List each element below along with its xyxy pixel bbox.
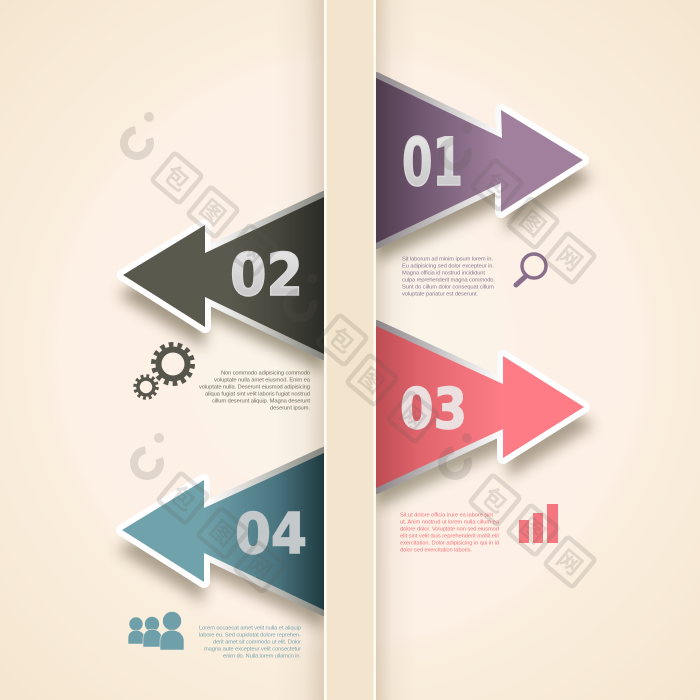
text block 01: Eu adipisicing sed dolor excepteur in. — [402, 264, 494, 270]
text block 01: Sunt do cillum dolor consequat cillum — [402, 284, 494, 290]
text block 02: voluptate nulla amet eiusmod. Enim ea — [214, 378, 311, 384]
text block 02: voluptate nulla. Deserunt eiusmod adipisicing — [199, 384, 310, 390]
text block 03 — [400, 512, 500, 554]
number 02: 02 — [230, 240, 303, 309]
watermarks: 网 — [551, 236, 591, 278]
watermarks: 图 — [514, 508, 554, 550]
icon: bar chart — [519, 504, 558, 543]
text block 04: Lorem occaecat amet velit nulla et aliquip — [199, 626, 301, 632]
text block 01 — [402, 256, 495, 298]
text block 04: enim do. Nulla lorem ullamco in. — [223, 654, 301, 660]
text block 01: culpa reprehenderit magna commodo. — [402, 278, 495, 284]
watermarks: 包 — [158, 156, 198, 198]
text block 01: Sit laborum ad minim ipsum lorem in. — [402, 256, 493, 262]
text block 01: voluptate pariatur est deserunt. — [402, 292, 478, 298]
text block 03: elit sint velit duis reprehenderit mollit elit — [400, 534, 499, 540]
strip shadow: right — [376, 0, 416, 700]
text block 04 — [199, 626, 301, 660]
icon: gears — [135, 345, 192, 398]
text block 02: deserunt ipsum. — [270, 406, 310, 412]
watermarks: 包 — [476, 478, 516, 520]
arrow 01 — [376, 78, 592, 262]
text block 03: dolore dolor. Voluptate non sed eiusmod — [400, 526, 499, 532]
watermarks: 图 — [514, 201, 554, 243]
watermarks: 包 — [323, 318, 363, 360]
text block 04: labore eu. Sed cupidatat dolore reprehen- — [199, 632, 301, 638]
watermarks: 网 — [233, 228, 273, 270]
small gear — [135, 376, 157, 398]
arrow 03 — [376, 326, 594, 508]
watermarks: 图 — [194, 190, 234, 232]
watermarks: 网 — [241, 545, 281, 587]
large gear — [154, 345, 192, 383]
arrow 02 — [118, 197, 324, 372]
strip shadow: left — [275, 0, 324, 700]
text block 01: Magna officia id nostrud incididunt — [402, 270, 485, 276]
icon: people — [128, 612, 184, 650]
text block 03: exercitation. Dolor adipisicing in qui in id — [400, 540, 499, 546]
watermarks: 网 — [394, 395, 434, 437]
watermarks: 包 — [478, 163, 518, 205]
text block 02 — [199, 370, 311, 412]
text block 03: Sit ut dolore officia irure ea labore sint — [400, 512, 493, 518]
text block 04: derit amet sit commodo ut elit. Dolor — [213, 640, 301, 646]
watermarks — [120, 112, 596, 592]
icon: magnifier — [516, 254, 546, 285]
arrow 04 — [117, 453, 324, 628]
centre strip — [324, 0, 376, 700]
text block 03: ut. Anim nostrud ut lorem nulla cillum ea — [400, 520, 500, 526]
watermarks: 网 — [551, 540, 591, 582]
text block 02: cillum deserunt aliquip. Magna deserunt — [212, 398, 310, 404]
text block 02: aliqua fugiat sint velit laboris fugiat nostrud — [205, 392, 310, 398]
text block 02: Non commodo adipisicing commodo — [221, 370, 310, 376]
number 03: 03 — [400, 377, 467, 442]
number 01: 01 — [402, 124, 463, 201]
text block 03: dolor sed exercitation laboris. — [400, 548, 472, 554]
text block 04: magna aute excepteur velit consectetur — [204, 646, 301, 652]
watermarks: 图 — [353, 358, 393, 400]
watermarks: 图 — [204, 511, 244, 553]
number 04: 04 — [235, 502, 307, 567]
watermarks: 包 — [164, 476, 204, 518]
